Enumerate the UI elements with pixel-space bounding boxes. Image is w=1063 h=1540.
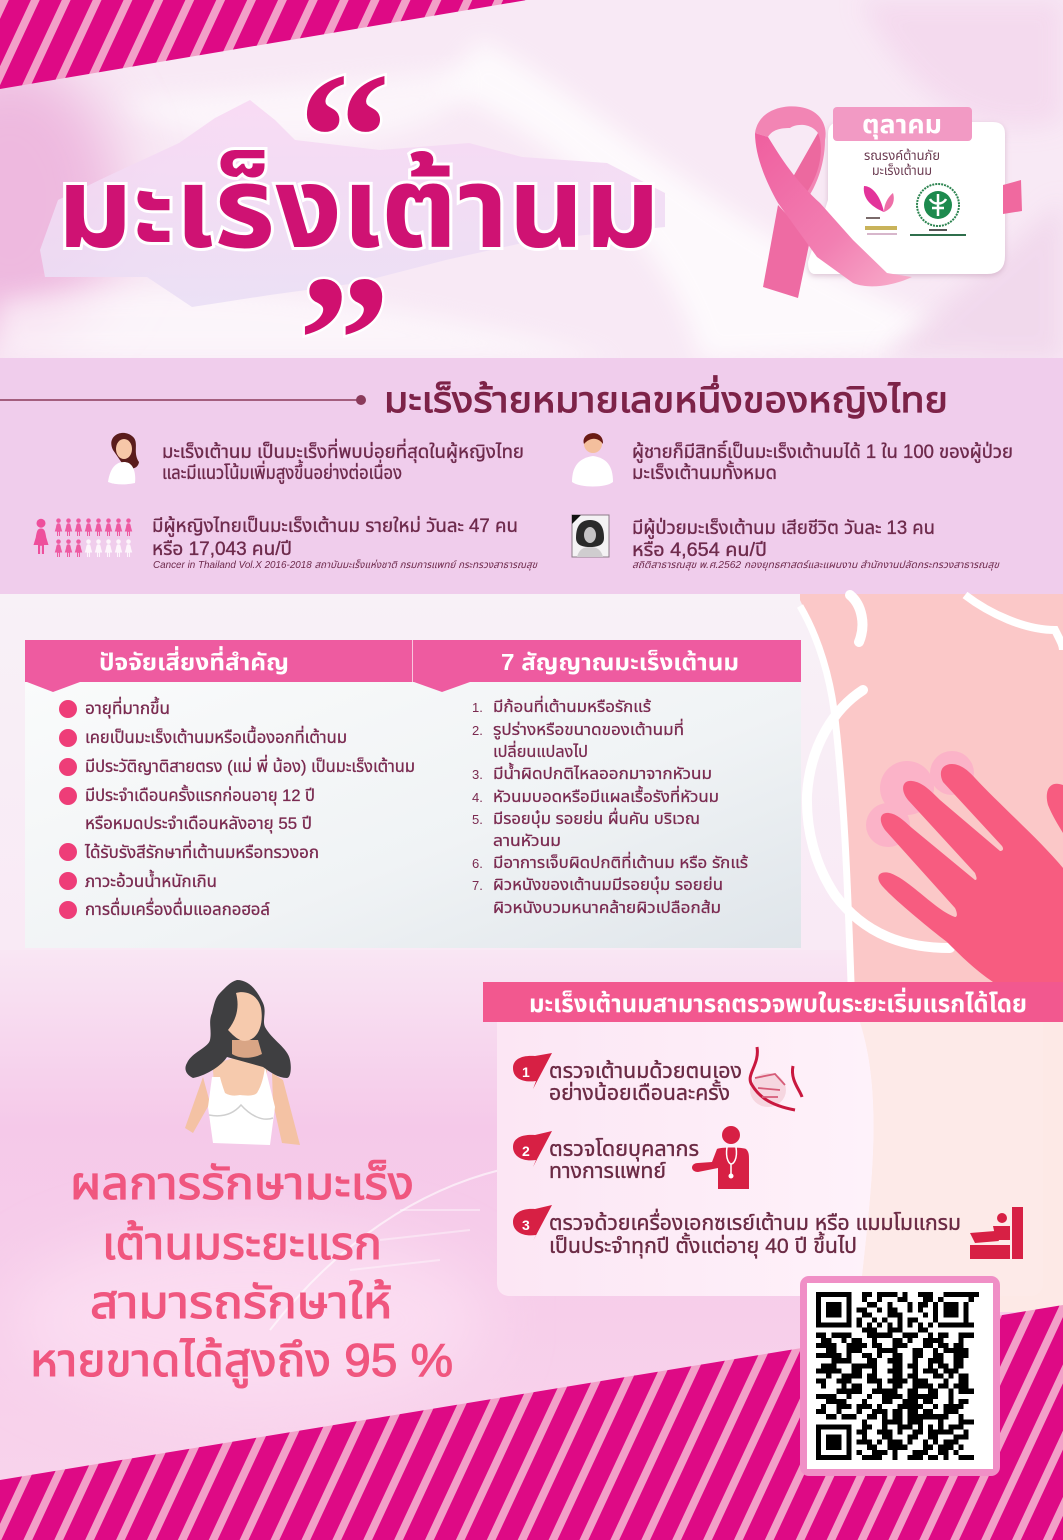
step 1 text: ตรวจเต้านมด้วยตนเอง xyxy=(549,1059,742,1083)
risk factor list: เคยเป็นมะเร็งเต้านมหรือเนื้องอกที่เต้านม xyxy=(85,725,347,747)
background: top satin xyxy=(0,0,1063,360)
top-left stripes xyxy=(0,0,527,89)
treatment outcome text xyxy=(30,1157,453,1388)
step 2 text xyxy=(549,1138,699,1183)
warning signs list xyxy=(472,695,749,917)
panel peach backdrop xyxy=(860,982,1063,1312)
table header xyxy=(25,640,801,682)
heading: seven signs: 7 สัญญาณมะเร็งเต้านม xyxy=(501,649,739,675)
panel: statistics band xyxy=(0,358,1063,594)
step 3 text xyxy=(549,1208,961,1259)
panel: early detection xyxy=(483,982,1063,1312)
panel heading: มะเร็งเต้านมสามารถตรวจพบในระยะเริ่มแรกได้โดย xyxy=(529,987,1027,1018)
ribbon tail right xyxy=(1003,180,1022,214)
hair xyxy=(185,980,291,1078)
risk factor list: มีประวัติญาติสายตรง (แม่ พี่ น้อง) เป็นมะเร็งเต้านม xyxy=(85,754,415,776)
icon: woman xyxy=(108,433,139,484)
stat: men text xyxy=(632,440,1013,484)
panel banner xyxy=(483,982,1063,1022)
warning signs list: รูปร่างหรือขนาดของเต้านมที่ xyxy=(493,718,684,739)
stat: women text: มะเร็งเต้านม เป็นมะเร็งที่พบบ่อยที่สุดในผู้หญิงไทย xyxy=(162,438,524,464)
arms xyxy=(185,1077,210,1133)
white top xyxy=(208,1067,275,1145)
stat: deaths: สถิติสาธารณสุข พ.ศ.2562 กองยุทธศาสตร์และแผนงาน สำนักงานปลัดกระทรวงสาธารณสุข xyxy=(632,560,1001,571)
warning signs list: ลานหัวนม xyxy=(493,833,561,850)
risk factor list: ภาวะอ้วนน้ำหนักเกิน xyxy=(85,869,217,891)
warning signs list: มีน้ำผิดปกติไหลออกมาจากหัวนม xyxy=(493,762,712,783)
month: ตุลาคม xyxy=(862,109,942,140)
treatment outcome text: เต้านมระยะแรก xyxy=(102,1217,382,1269)
panel body xyxy=(497,1022,874,1296)
stat: new cases: Cancer in Thailand Vol.X 2016-2018 สถาบันมะเร็งแห่งชาติ กรมการแพทย์ กระทรวงสาธารณสุข xyxy=(153,559,539,571)
brush stroke behind title xyxy=(40,100,665,307)
background: lower pink feather wash xyxy=(0,950,1063,1540)
QR code xyxy=(800,1276,1000,1476)
step 1 text xyxy=(549,1059,742,1105)
step 1 badge: 1 xyxy=(522,1064,530,1080)
logo: heart xyxy=(864,186,897,235)
campaign card with ribbon: มะเร็งเต้านม xyxy=(872,163,932,178)
campaign card with ribbon xyxy=(755,106,1022,298)
step 3 text: เป็นประจำทุกปี ตั้งแต่อายุ 40 ปี ขึ้นไป xyxy=(549,1231,857,1259)
warning signs list: 6. xyxy=(472,856,483,871)
icon: self exam xyxy=(750,1047,802,1110)
bottom stripes xyxy=(0,1305,1063,1540)
step 3 badge: 3 xyxy=(522,1217,530,1233)
warning signs list: 7. xyxy=(472,878,483,893)
month tag xyxy=(833,107,972,141)
icon: man xyxy=(572,433,613,486)
face xyxy=(228,992,262,1041)
illustration: breast self-check with hand xyxy=(800,594,1063,982)
warning signs list: มีรอยบุ๋ม รอยย่น ผื่นคัน บริเวณ xyxy=(493,807,700,828)
step 1 badge xyxy=(513,1053,552,1089)
step 2 badge: 2 xyxy=(522,1143,530,1159)
icon: pictogram of women xyxy=(34,518,132,557)
step 3 badge xyxy=(513,1205,552,1241)
risk factor list xyxy=(59,696,415,919)
closing quote: ” xyxy=(298,238,390,443)
warning signs list: 3. xyxy=(472,767,483,782)
title xyxy=(57,35,660,443)
stat: deaths: หรือ 4,654 คน/ปี xyxy=(632,540,767,561)
stat: new cases xyxy=(152,514,539,571)
icon: doctor xyxy=(692,1126,749,1189)
icon: memorial portrait xyxy=(572,515,609,557)
risk factor list: การดื่มเครื่องดื่มแอลกอฮอล์ xyxy=(85,897,270,919)
treatment outcome text: สามารถรักษาให้ xyxy=(90,1276,392,1328)
warning signs list: 2. xyxy=(472,723,483,738)
stat: women text xyxy=(162,438,524,485)
warning signs list: หัวนมบอดหรือมีแผลเรื้อรังที่หัวนม xyxy=(493,785,719,806)
card xyxy=(808,122,1005,274)
heading: risk factors: ปัจจัยเสี่ยงที่สำคัญ xyxy=(99,646,289,675)
stat: new cases: หรือ 17,043 คน/ปี xyxy=(152,539,292,560)
warning signs list: 1. xyxy=(472,700,483,715)
stat: men text: มะเร็งเต้านมทั้งหมด xyxy=(632,460,777,484)
icon: mammogram machine xyxy=(970,1207,1023,1259)
warning signs list: มีอาการเจ็บผิดปกติที่เต้านม หรือ รักแร้ xyxy=(493,851,749,872)
title text: มะเร็งเต้านม xyxy=(57,145,660,271)
campaign text: รณรงค์ต้านภัย xyxy=(864,148,940,163)
band heading: มะเร็งร้ายหมายเลขหนึ่งของหญิงไทย xyxy=(384,375,948,420)
step 2 text: ตรวจโดยบุคลากร xyxy=(549,1138,699,1162)
warning signs list: ผิวหนังของเต้านมมีรอยบุ๋ม รอยย่น xyxy=(493,875,723,894)
hand xyxy=(878,764,1063,982)
stat: women text: และมีแนวโน้มเพิ่มสูงขึ้นอย่างต่อเนื่อง xyxy=(162,459,402,485)
panel: risk factors and warning signs xyxy=(25,640,801,948)
stat: new cases: มีผู้หญิงไทยเป็นมะเร็งเต้านม รายใหม่ วันละ 47 คน xyxy=(152,514,518,538)
treatment outcome text: ผลการรักษามะเร็ง xyxy=(70,1157,414,1209)
warning signs list: 4. xyxy=(472,790,483,805)
step 3 text: ตรวจด้วยเครื่องเอกซเรย์เต้านม หรือ แมมโมแกรม xyxy=(549,1208,961,1235)
risk factor list: มีประจำเดือนครั้งแรกก่อนอายุ 12 ปี xyxy=(85,784,315,806)
stat: men text: ผู้ชายก็มีสิทธิ์เป็นมะเร็งเต้านมได้ 1 ใน 100 ของผู้ป่วย xyxy=(632,440,1013,464)
risk factor list: ได้รับรังสีรักษาที่เต้านมหรือทรวงอก xyxy=(84,840,319,862)
logo: department of medical services xyxy=(910,184,966,236)
step 1 text: อย่างน้อยเดือนละครั้ง xyxy=(549,1079,730,1105)
treatment outcome text: หายขาดได้สูงถึง 95 % xyxy=(30,1334,453,1388)
warning signs list: เปลี่ยนแปลงไป xyxy=(493,740,588,761)
stat: deaths: มีผู้ป่วยมะเร็งเต้านม เสียชีวิต วันละ 13 คน xyxy=(632,516,935,540)
background: middle satin xyxy=(0,594,1063,974)
finger touch halo xyxy=(866,751,974,847)
opening quote: “ xyxy=(298,35,390,240)
neck xyxy=(232,1040,262,1058)
risk factor list: หรือหมดประจำเดือนหลังอายุ 55 ปี xyxy=(85,814,312,834)
warning signs list: ผิวหนังบวมหนาคล้ายผิวเปลือกส้ม xyxy=(493,900,721,917)
ribbon xyxy=(755,106,912,298)
step 2 badge xyxy=(513,1131,552,1167)
chest xyxy=(213,1058,267,1100)
step 2 text: ทางการแพทย์ xyxy=(549,1160,666,1183)
stat: deaths xyxy=(632,516,1001,571)
warning signs list: 5. xyxy=(472,812,483,827)
illustration: woman with long dark hair xyxy=(185,980,300,1145)
risk factor list: อายุที่มากขึ้น xyxy=(85,696,170,719)
warning signs list: มีก้อนที่เต้านมหรือรักแร้ xyxy=(493,695,652,716)
leader line xyxy=(0,395,366,405)
